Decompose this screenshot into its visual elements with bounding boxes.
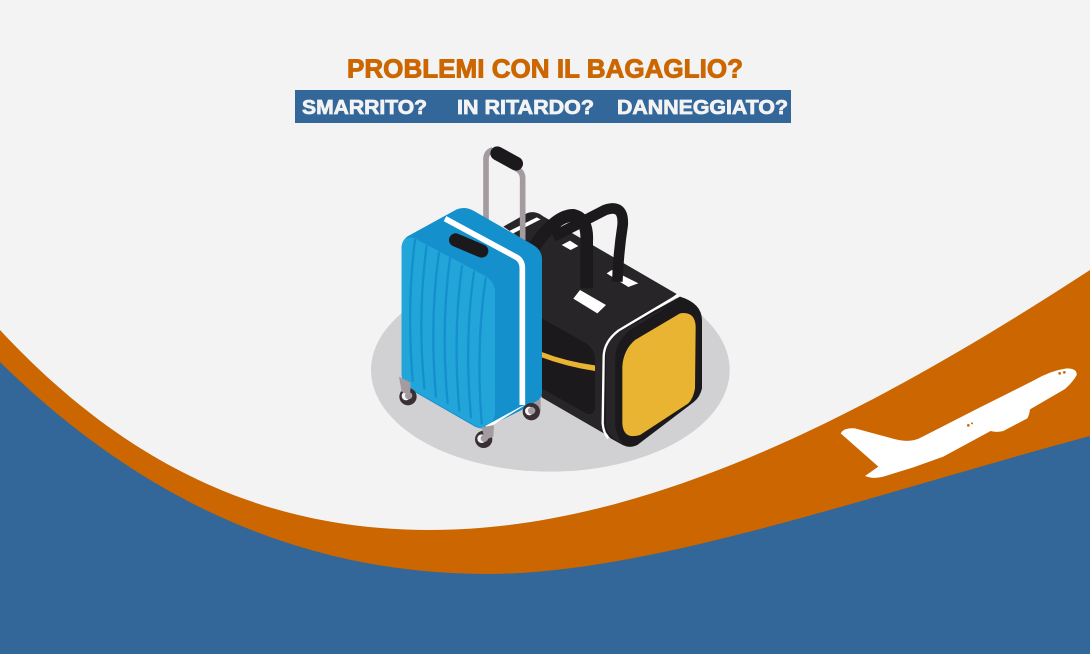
bag body	[503, 212, 677, 435]
wheel front centre	[475, 425, 494, 448]
airplane silhouette	[841, 368, 1077, 478]
subtitle bar	[295, 90, 791, 123]
blue suitcase	[402, 208, 542, 429]
suitcase shell	[402, 208, 542, 428]
title: PROBLEMI CON IL BAGAGLIO?	[347, 56, 743, 84]
suitcase bottom white edge	[485, 405, 525, 428]
bag back handle	[553, 208, 623, 282]
blue ground wave	[0, 362, 1090, 654]
bag side pocket	[542, 318, 595, 414]
bag front handle	[534, 215, 587, 288]
ground shadow ellipse	[371, 268, 730, 472]
bag end inner ring	[606, 300, 678, 444]
bag yellow strip	[542, 352, 595, 371]
bag white tags	[562, 241, 638, 313]
suitcase front face	[402, 238, 495, 429]
label: in ritardo: IN RITARDO?	[457, 96, 594, 119]
bag top white stripe	[510, 217, 541, 234]
handle rods	[486, 150, 523, 242]
bag yellow end panel	[622, 313, 696, 436]
airplane	[841, 368, 1077, 478]
label: smarrito: SMARRITO?	[302, 96, 427, 119]
orange swoosh	[0, 270, 1090, 654]
luggage illustration	[371, 150, 730, 472]
suitcase top handle	[456, 240, 482, 251]
airplane windows	[967, 371, 1066, 427]
suitcase ridges	[410, 240, 486, 423]
wheel front left	[399, 377, 417, 405]
label: danneggiato: DANNEGGIATO?	[617, 96, 788, 119]
bag white piping	[603, 295, 678, 438]
pull handle	[486, 150, 523, 242]
bag end frame	[605, 297, 702, 447]
duffel bag	[503, 208, 702, 447]
suitcase white band	[445, 219, 522, 405]
wheels	[399, 377, 541, 448]
handle grip	[497, 153, 516, 164]
wheel back right	[523, 398, 541, 420]
